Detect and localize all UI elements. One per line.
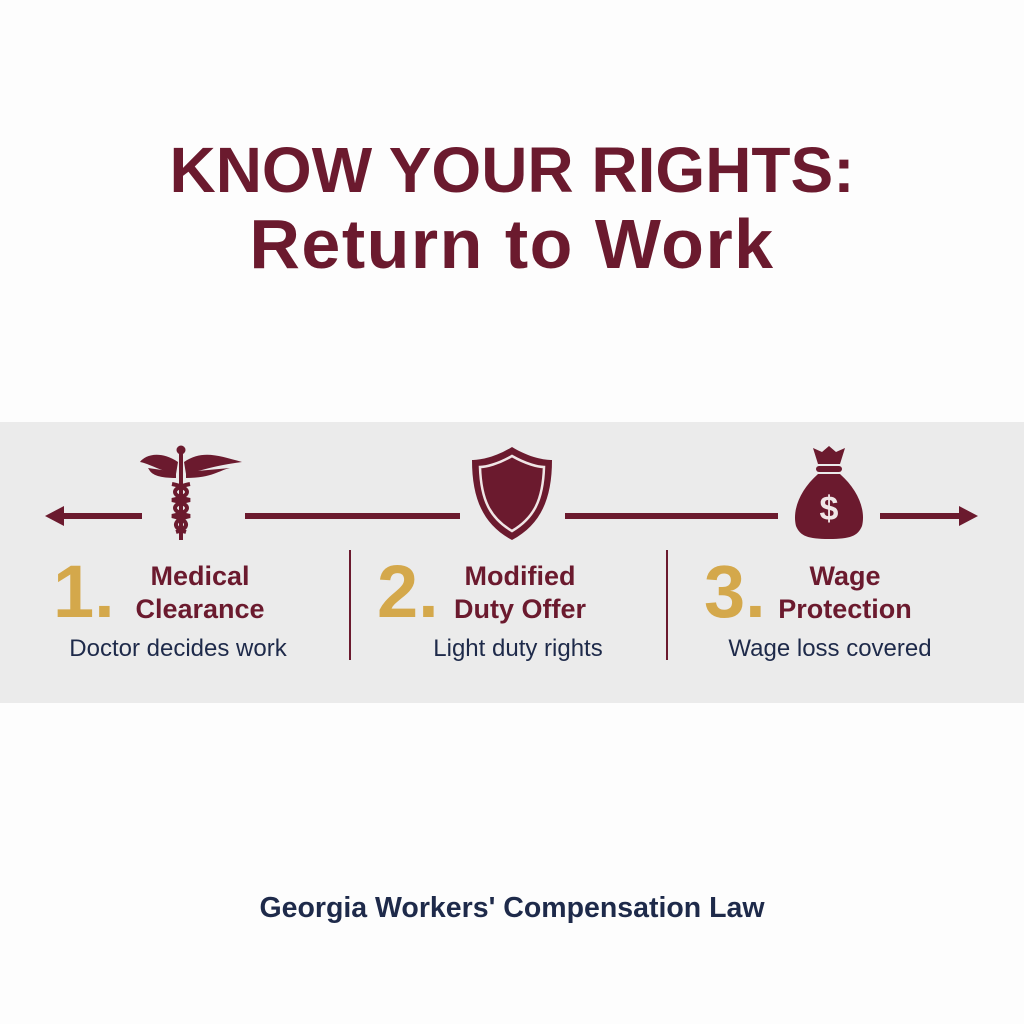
heading 2 xyxy=(454,561,586,624)
heading 3: Wage xyxy=(809,561,880,591)
number 3: 3. xyxy=(704,550,766,633)
heading 3 xyxy=(778,561,912,624)
icon: money bag: $ xyxy=(820,490,839,528)
title: Return to Work xyxy=(249,205,775,283)
number 2: 2. xyxy=(377,550,439,633)
heading 1: Medical xyxy=(150,561,250,591)
subtitle 1: Doctor decides work xyxy=(69,635,287,662)
icon: money bag xyxy=(795,446,863,539)
icon: shield xyxy=(472,447,552,540)
step 1 xyxy=(53,550,287,662)
number 1: 1. xyxy=(53,550,115,633)
heading 2: Duty Offer xyxy=(454,594,586,624)
subtitle 3: Wage loss covered xyxy=(728,635,932,662)
heading 1 xyxy=(135,561,265,624)
timeline arrows and icons xyxy=(45,446,978,540)
heading 3: Protection xyxy=(778,594,912,624)
heading 1: Clearance xyxy=(135,594,265,624)
divider xyxy=(349,550,351,660)
title xyxy=(169,134,855,283)
title: KNOW YOUR RIGHTS: xyxy=(169,134,855,206)
step 2 xyxy=(377,550,603,662)
footer: Georgia Workers' Compensation Law xyxy=(259,892,765,924)
icon: caduceus xyxy=(140,446,242,540)
step 3 xyxy=(704,550,932,662)
heading 2: Modified xyxy=(464,561,575,591)
panel: steps band xyxy=(0,422,1024,703)
divider xyxy=(666,550,668,660)
subtitle 2: Light duty rights xyxy=(433,635,603,662)
